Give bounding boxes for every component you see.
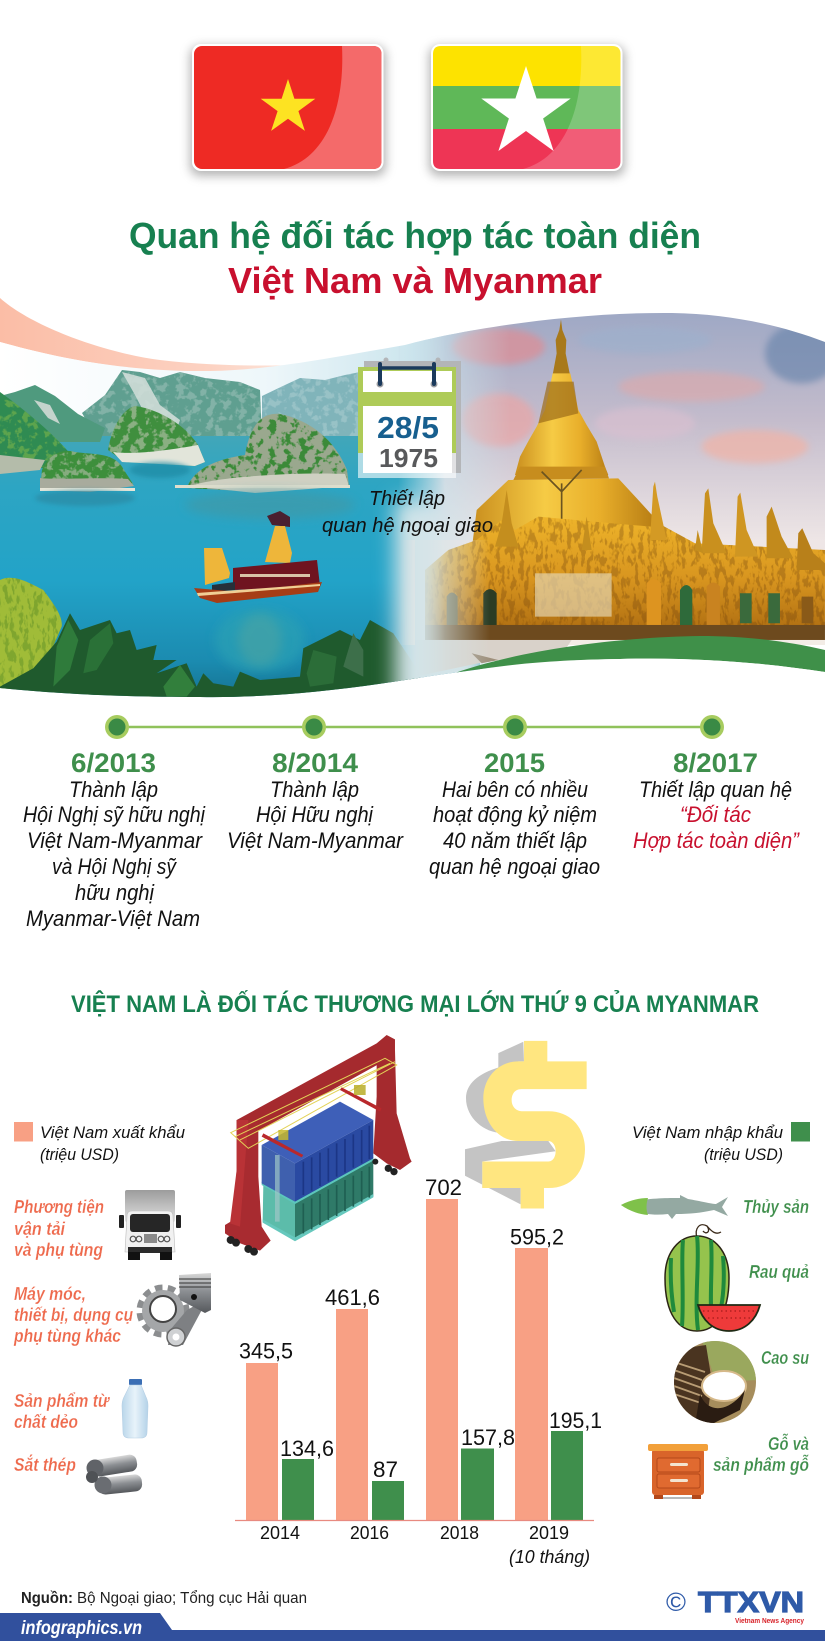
icon: plastic bottle [122, 1379, 148, 1438]
title: Quan hệ đối tác hợp tác toàn diện [129, 215, 701, 256]
export labels [13, 1197, 133, 1475]
import labels: Rau quả [749, 1262, 809, 1282]
timeline: 8/2014: Thành lập [270, 777, 359, 802]
timeline: 2015: quan hệ ngoại giao [429, 854, 600, 879]
timeline: 8/2017: Hợp tác toàn diện” [633, 828, 801, 853]
timeline: 6/2013: và Hội Nghị sỹ [52, 854, 178, 879]
export labels: chất dẻo [14, 1412, 78, 1432]
timeline: 8/2017: Thiết lập quan hệ [639, 777, 792, 802]
icon: gear and piston [141, 1273, 211, 1346]
text: diplomatic relations note [322, 488, 493, 537]
text: diplomatic relations note: Thiết lập [369, 488, 445, 510]
export labels: Phương tiện [14, 1197, 104, 1217]
green wave [455, 636, 825, 673]
timeline: 8/2014: 8/2014 [272, 748, 358, 778]
logo: TTXVN: © [666, 1587, 686, 1617]
timeline: 6/2013: hữu nghị [75, 880, 155, 905]
year labels: 2018 [440, 1523, 479, 1543]
photo banner: Ha Long Bay and Shwedagon pagoda [0, 300, 825, 720]
sky fade by calendar [406, 326, 499, 540]
source note: Nguồn: [21, 1590, 73, 1607]
export labels: Sản phẩm từ [14, 1391, 111, 1411]
icon: wooden cabinet [648, 1444, 708, 1499]
import labels: Gỗ và [768, 1433, 809, 1454]
import labels [713, 1197, 809, 1475]
value labels: 461,6 [325, 1285, 380, 1310]
foliage foreground [0, 578, 420, 710]
icon: junk boat [194, 511, 322, 603]
value labels [239, 1175, 602, 1482]
timeline axis [105, 715, 724, 739]
timeline: 6/2013: Myanmar-Việt Nam [26, 906, 200, 931]
text: diplomatic relations note: quan hệ ngoại giao [322, 515, 493, 537]
flag: Myanmar [429, 44, 625, 176]
timeline: 6/2013: Thành lập [69, 777, 158, 802]
legend: Vietnam imports: Việt Nam nhập khẩu [632, 1123, 784, 1142]
timeline: 2015: 2015 [484, 748, 545, 778]
timeline: 2015 [429, 748, 600, 879]
title: Việt Nam và Myanmar [228, 260, 602, 301]
timeline: 8/2017: “Đối tác [680, 802, 751, 827]
source note: Bộ Ngoại giao; Tổng cục Hải quan [77, 1589, 307, 1607]
bars 2019 [515, 1248, 583, 1521]
timeline: 2015: hoạt động kỷ niệm [433, 802, 597, 827]
bars 2014 [246, 1363, 314, 1521]
flag: Vietnam [190, 44, 386, 176]
legend: Vietnam imports: (triệu USD) [704, 1145, 783, 1164]
import labels: Thủy sản [743, 1197, 809, 1217]
export labels: Máy móc, [14, 1284, 86, 1304]
year labels: 2019 [529, 1523, 569, 1543]
export labels: Sắt thép [14, 1454, 76, 1475]
footer bar: infographics.vn [21, 1618, 142, 1639]
timeline: 6/2013: Việt Nam-Myanmar [27, 828, 204, 853]
pagoda stupa [472, 319, 655, 563]
timeline: 2015: 40 năm thiết lập [443, 828, 587, 853]
value labels: 157,8 [461, 1425, 515, 1450]
chart baseline [235, 1520, 594, 1522]
legend: Vietnam exports [14, 1122, 186, 1164]
bar chart: trade by year [235, 1175, 602, 1567]
timeline: 8/2014 [227, 748, 405, 853]
import labels: sản phẩm gỗ [713, 1454, 809, 1475]
value labels: 87 [373, 1457, 398, 1482]
bars 2016 [336, 1309, 404, 1521]
photo: Shwedagon pagoda [380, 300, 825, 680]
section heading: trade: VIỆT NAM LÀ ĐỐI TÁC THƯƠNG MẠI LỚN THỨ 9 CỦA MYANMAR [71, 989, 759, 1018]
export labels: và phụ tùng [14, 1240, 103, 1260]
export labels: vận tải [14, 1219, 66, 1239]
icon: steel pipes [86, 1454, 143, 1495]
photo: Ha Long Bay [0, 330, 480, 702]
value labels: 702 [425, 1175, 462, 1200]
temple fade [415, 540, 490, 680]
value labels: 195,1 [549, 1408, 602, 1433]
export labels: thiết bị, dụng cụ [14, 1305, 133, 1325]
sky clouds [452, 323, 825, 463]
legend: Vietnam imports [632, 1122, 810, 1164]
icon: watermelon [665, 1225, 760, 1331]
year labels: (10 tháng) [509, 1547, 590, 1567]
icon: fish [621, 1195, 728, 1219]
year labels: 2014 [260, 1523, 300, 1543]
title [129, 215, 701, 301]
icon: dollar sign [465, 1041, 587, 1208]
decorative pink wave [0, 298, 300, 372]
timeline: 8/2014: Việt Nam-Myanmar [227, 828, 405, 853]
timeline: 6/2013 [23, 748, 206, 931]
year labels: 2016 [350, 1523, 389, 1543]
timeline: 6/2013: 6/2013 [71, 748, 156, 778]
timeline: 2015: Hai bên có nhiều [442, 777, 588, 802]
icon: truck [119, 1190, 181, 1260]
icon: gantry crane with containers [225, 1035, 412, 1256]
value labels: 345,5 [239, 1338, 293, 1364]
export labels: phụ tùng khác [13, 1326, 121, 1346]
logo: TTXVN: Vietnam News Agency [735, 1616, 805, 1625]
timeline: 8/2014: Hội Hữu nghị [256, 802, 374, 827]
value labels: 134,6 [280, 1436, 334, 1461]
legend: Vietnam exports: Việt Nam xuất khẩu [40, 1123, 186, 1142]
logo: TTXVN [666, 1587, 805, 1625]
bars 2018 [426, 1199, 494, 1521]
import labels: Cao su [761, 1348, 809, 1368]
calendar: 28/5/1975: 1975 [379, 443, 438, 473]
footer bar [0, 1613, 825, 1641]
timeline: 8/2017: 8/2017 [673, 748, 758, 778]
legend: Vietnam exports: (triệu USD) [40, 1145, 119, 1164]
year labels [260, 1523, 590, 1567]
value labels: 595,2 [510, 1224, 564, 1250]
timeline: 8/2017 [633, 748, 801, 853]
calendar: 28/5/1975: 28/5 [377, 410, 439, 445]
logo: TTXVN: TTXVN [698, 1587, 804, 1619]
timeline: 6/2013: Hội Nghị sỹ hữu nghị [23, 802, 206, 827]
icon: rubber latex cup [674, 1341, 756, 1423]
photo fade into pagoda side [395, 500, 485, 720]
temple band [415, 482, 825, 677]
calendar: 28/5/1975 [358, 358, 461, 478]
islands [40, 406, 350, 493]
